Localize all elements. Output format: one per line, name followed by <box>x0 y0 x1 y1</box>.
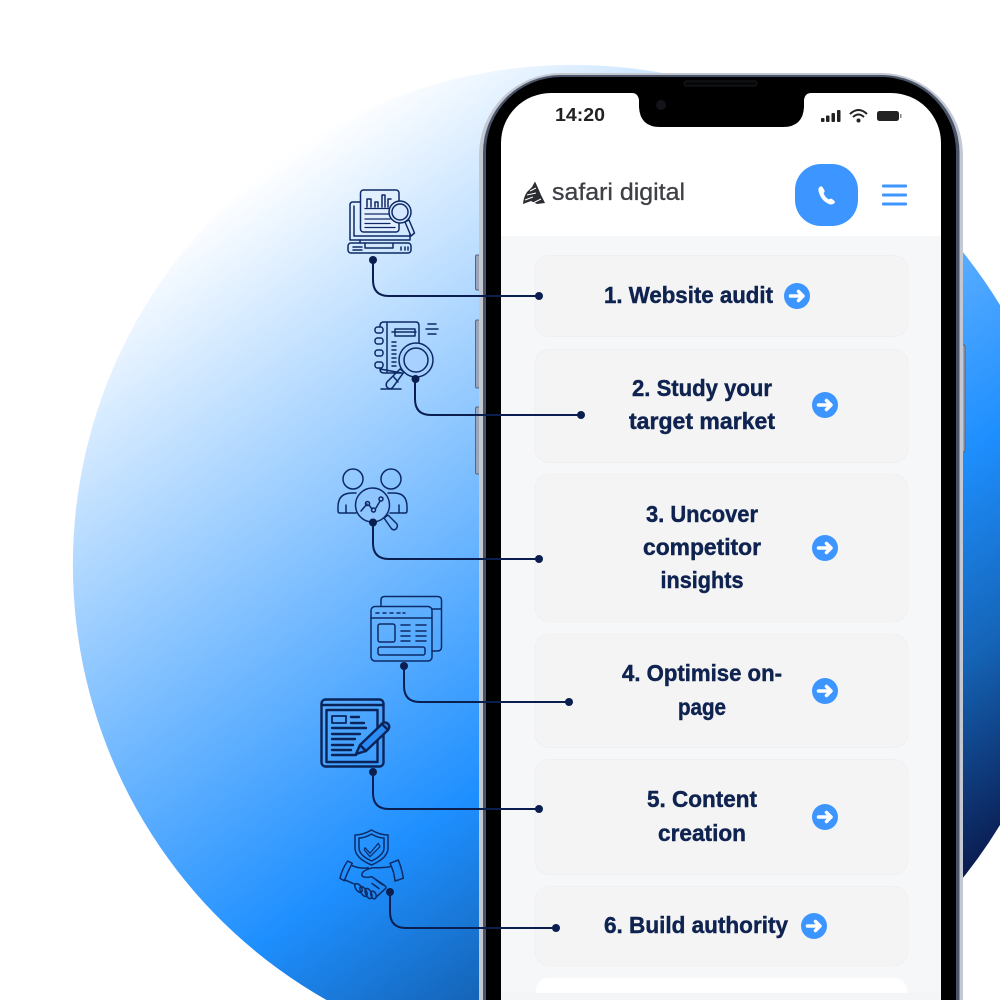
connector 3 <box>369 518 543 563</box>
phone side buttons <box>476 255 965 474</box>
step 3 text: 3. Uncover <box>646 501 758 527</box>
call button <box>795 164 858 226</box>
icon: content creation <box>322 700 389 766</box>
status time: 14:20 <box>555 105 605 125</box>
step 6 arrow <box>801 913 827 939</box>
step 3 arrow <box>812 535 838 561</box>
step 3 text: competitor <box>643 534 761 560</box>
phone screen <box>501 93 941 1000</box>
camera <box>656 100 666 110</box>
step cards <box>535 256 908 966</box>
step 3 text: insights <box>660 567 744 593</box>
icon: on-page optimisation <box>371 596 442 661</box>
step 2 text <box>629 375 775 434</box>
step 4 arrow <box>812 678 838 704</box>
connector 6 <box>386 888 560 932</box>
icon: build authority <box>340 830 403 900</box>
icon: competitor insights <box>338 469 407 530</box>
step 1 text: 1. Website audit <box>604 282 773 308</box>
icon: website audit <box>348 190 414 253</box>
status icons <box>821 110 902 122</box>
connector 5 <box>369 768 543 813</box>
step 2 text: 2. Study your <box>632 375 772 401</box>
speaker <box>684 81 757 86</box>
step 5 text: 5. Content <box>647 786 757 812</box>
step 5 arrow <box>812 804 838 830</box>
step 6 text: 6. Build authority <box>604 912 788 938</box>
step 2 text: target market <box>629 408 775 434</box>
connector 2 <box>412 375 585 419</box>
partial seventh card <box>536 978 907 993</box>
logo mark <box>523 182 545 204</box>
bottom strip <box>501 993 941 1000</box>
step 1 arrow <box>784 283 810 309</box>
icon: study target market <box>375 322 438 389</box>
step 4 text <box>622 660 782 720</box>
phone mockup <box>476 73 965 1000</box>
step 4 text: 4. Optimise on- <box>622 660 782 686</box>
step 5 text <box>647 786 757 846</box>
step 2 arrow <box>812 392 838 418</box>
step 3 text <box>643 501 761 593</box>
logo text: safari digital <box>552 179 685 206</box>
notch <box>632 93 811 127</box>
connector 4 <box>400 662 573 706</box>
hamburger menu <box>882 184 907 206</box>
step 4 text: page <box>678 694 726 720</box>
step 5 text: creation <box>658 820 746 846</box>
connector 1 <box>369 256 543 300</box>
phone frame <box>479 73 963 1000</box>
